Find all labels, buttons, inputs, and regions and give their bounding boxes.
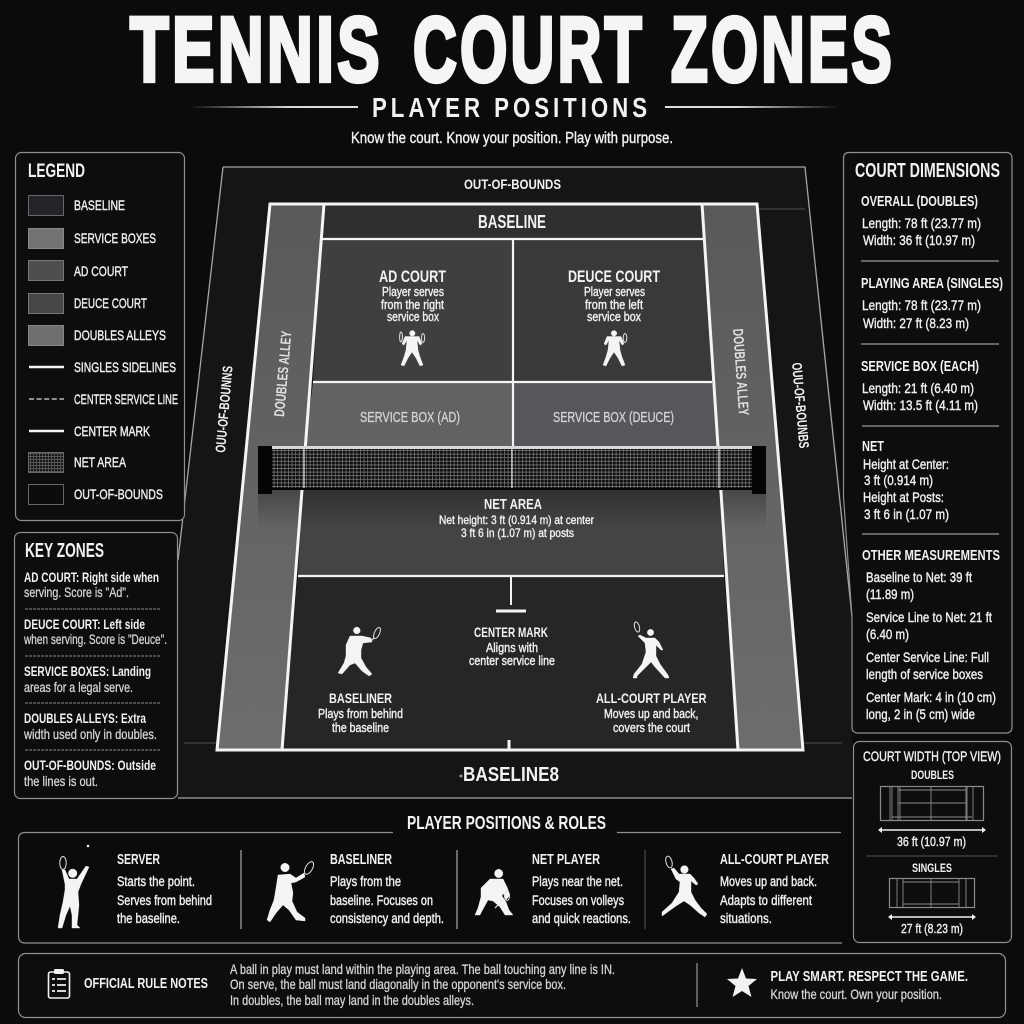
icon: baseliner bbox=[267, 860, 315, 922]
key zone: deuce court: DEUCE COURT: Left side bbox=[24, 616, 145, 632]
legend: doubles alleys bbox=[28, 326, 166, 346]
net area text bbox=[439, 496, 594, 540]
icon: court all-court player bbox=[633, 621, 669, 678]
net player text: NET PLAYER bbox=[532, 852, 600, 868]
net dimensions: 3 ft (0.914 m) bbox=[864, 472, 933, 488]
singles diagram bbox=[888, 861, 976, 936]
doubles alleys bbox=[217, 204, 803, 750]
ad court text: service box bbox=[387, 310, 440, 324]
legend: out-of-bounds bbox=[28, 484, 163, 504]
panel: player positions and roles bbox=[18, 813, 842, 943]
key zone: service boxes: areas for a legal serve. bbox=[24, 679, 133, 695]
all-court player role text: Adapts to different bbox=[720, 893, 812, 908]
center mark text: CENTER MARK bbox=[474, 625, 548, 640]
legend: service boxes bbox=[28, 228, 156, 248]
panel: official rule notes bbox=[18, 954, 1006, 1018]
legend heading: LEGEND bbox=[28, 161, 85, 182]
baseliner role text: consistency and depth. bbox=[330, 911, 444, 926]
server text: Starts the point. bbox=[117, 874, 195, 889]
rule notes text bbox=[230, 961, 615, 1008]
service box ad bbox=[305, 382, 513, 447]
deuce court text bbox=[568, 267, 660, 324]
overall doubles: Width: 36 ft (10.97 m) bbox=[863, 232, 975, 248]
roles heading: PLAYER POSITIONS & ROLES bbox=[407, 813, 606, 833]
net player text: and quick reactions. bbox=[532, 911, 631, 926]
all-court player text: Moves up and back, bbox=[604, 706, 698, 721]
baseliner text bbox=[318, 690, 403, 735]
key zone: doubles alleys bbox=[23, 710, 157, 742]
net player text: Focuses on volleys bbox=[532, 893, 624, 908]
key zone: doubles alleys: width used only in doubles. bbox=[23, 726, 157, 742]
legend: deuce court bbox=[28, 294, 147, 314]
title bbox=[130, 0, 895, 101]
legend: ad court: AD COURT bbox=[74, 263, 128, 279]
key zone: ad court: AD COURT: Right side when bbox=[24, 569, 159, 585]
icon: server bbox=[58, 845, 89, 928]
rule notes heading: OFFICIAL RULE NOTES bbox=[84, 976, 208, 992]
service box each: Width: 13.5 ft (4.11 m) bbox=[863, 397, 978, 413]
key zone: out-of-bounds bbox=[24, 757, 156, 789]
key zone: out-of-bounds: the lines is out. bbox=[24, 773, 98, 789]
playing area singles: Width: 27 ft (8.23 m) bbox=[863, 315, 969, 331]
all-court player role text: ALL-COURT PLAYER bbox=[720, 852, 829, 868]
deuce court text: DEUCE COURT bbox=[568, 267, 660, 286]
key zone: service boxes: SERVICE BOXES: Landing bbox=[24, 663, 151, 679]
net area text: 3 ft 6 in (1.07 m) at posts bbox=[461, 526, 574, 540]
label: out-of-bounds right: OUU-OF-BOUNBS bbox=[789, 362, 812, 449]
center mark text: Aligns with bbox=[486, 641, 538, 655]
all-court player text bbox=[596, 690, 706, 735]
other measurements: (11.89 m) bbox=[866, 586, 914, 602]
singles diagram: 27 ft (8.23 m) bbox=[901, 921, 963, 936]
label: baseline top: BASELINE bbox=[478, 212, 546, 232]
closing message: PLAY SMART. RESPECT THE GAME. bbox=[770, 969, 968, 985]
legend: center service line: CENTER SERVICE LINE bbox=[74, 391, 178, 407]
panel: court dimensions bbox=[844, 152, 1012, 733]
key zone: ad court: serving. Score is "Ad". bbox=[24, 584, 129, 600]
ad court text: from the right bbox=[381, 298, 444, 312]
key zone: ad court bbox=[24, 569, 159, 600]
key zone: deuce court: when serving. Score is "Deuce". bbox=[23, 631, 167, 647]
overall doubles: OVERALL (DOUBLES) bbox=[861, 193, 978, 210]
icon: all-court player bbox=[662, 855, 707, 917]
other measurements: Service Line to Net: 21 ft bbox=[866, 609, 992, 625]
deuce court bbox=[513, 239, 712, 382]
baseliner text: the baseline bbox=[332, 720, 389, 735]
panel: court width bbox=[854, 742, 1012, 942]
overall doubles bbox=[861, 193, 981, 248]
net player text bbox=[532, 852, 631, 926]
baseliner text: Plays from behind bbox=[318, 706, 403, 721]
server text: the baseline. bbox=[117, 911, 180, 926]
net dimensions: Height at Center: bbox=[863, 456, 949, 472]
legend: center mark bbox=[29, 423, 150, 439]
subtitle: PLAYER POSITIONS bbox=[372, 92, 651, 123]
title: TENNIS bbox=[130, 0, 383, 101]
deuce court text: Player serves bbox=[584, 285, 645, 299]
other measurements bbox=[862, 547, 1000, 722]
playing area singles: Length: 78 ft (23.77 m) bbox=[862, 297, 981, 313]
closing message: Know the court. Own your position. bbox=[770, 987, 942, 1002]
net dimensions: NET bbox=[862, 438, 884, 455]
rule notes text: A ball in play must land within the playing area. The ball touching any line is IN. bbox=[230, 961, 615, 977]
legend: net area: NET AREA bbox=[74, 454, 126, 470]
net area text: Net height: 3 ft (0.914 m) at center bbox=[439, 513, 594, 527]
label: out-of-bounds left: OUU-OF-BOUNNS bbox=[212, 365, 236, 453]
server text: Serves from behind bbox=[117, 893, 212, 908]
baseliner role text: Plays from the bbox=[330, 874, 401, 889]
back court bbox=[282, 576, 738, 750]
panel: key zones bbox=[14, 532, 178, 798]
panel: legend bbox=[16, 152, 184, 520]
doubles diagram: 36 ft (10.97 m) bbox=[897, 834, 966, 849]
legend: baseline: BASELINE bbox=[74, 197, 125, 213]
label: doubles alley right: DOUBLES ALLEY bbox=[729, 328, 751, 416]
service box each: SERVICE BOX (EACH) bbox=[861, 358, 979, 375]
closing message bbox=[770, 969, 968, 1002]
other measurements: Baseline to Net: 39 ft bbox=[866, 569, 972, 585]
net area text: NET AREA bbox=[484, 496, 542, 513]
label: out-of-bounds top: OUT-OF-BOUNDS bbox=[464, 176, 561, 192]
legend: service boxes: SERVICE BOXES bbox=[74, 230, 156, 246]
rule notes text: On serve, the ball must land diagonally in the opponent's service box. bbox=[230, 976, 566, 992]
ad court bbox=[313, 239, 513, 382]
server text: SERVER bbox=[117, 852, 160, 868]
center mark text: center service line bbox=[469, 654, 555, 668]
icon: court baseliner bbox=[338, 626, 382, 676]
label: baseline bottom: BASELINE8 bbox=[463, 764, 559, 786]
title: ZONES bbox=[671, 0, 895, 101]
icon: ad court player bbox=[400, 330, 425, 366]
key zone: doubles alleys: DOUBLES ALLEYS: Extra bbox=[24, 710, 146, 726]
service box each: Length: 21 ft (6.40 m) bbox=[862, 380, 974, 396]
label: doubles alley left: DOUBLES ALLEY bbox=[272, 330, 295, 417]
icon: clipboard bbox=[48, 969, 70, 998]
deuce court text: from the left bbox=[585, 298, 643, 312]
baseliner role text: BASELINER bbox=[330, 852, 392, 868]
center mark text bbox=[469, 625, 555, 668]
doubles diagram: DOUBLES bbox=[911, 768, 954, 782]
other measurements: length of service boxes bbox=[866, 666, 983, 682]
title: COURT bbox=[413, 0, 645, 101]
all-court player role text bbox=[720, 852, 829, 926]
other measurements: long, 2 in (5 cm) wide bbox=[866, 706, 975, 722]
rule notes text: In doubles, the ball may land in the doubles alleys. bbox=[230, 992, 474, 1008]
net area floor bbox=[258, 447, 766, 576]
deuce court text: service box bbox=[587, 310, 642, 324]
baseliner role text: baseline. Focuses on bbox=[330, 893, 433, 908]
legend: doubles alleys: DOUBLES ALLEYS bbox=[74, 327, 166, 343]
other measurements: Center Service Line: Full bbox=[866, 649, 989, 665]
doubles diagram bbox=[878, 768, 986, 849]
all-court player text: ALL-COURT PLAYER bbox=[596, 690, 706, 706]
playing area singles bbox=[861, 275, 1003, 331]
all-court player role text: situations. bbox=[720, 911, 772, 926]
baseline band bbox=[321, 204, 704, 239]
key zone: deuce court bbox=[23, 616, 167, 647]
legend: net area bbox=[28, 452, 126, 472]
legend: out-of-bounds: OUT-OF-BOUNDS bbox=[74, 486, 163, 502]
all-court player role text: Moves up and back. bbox=[720, 874, 817, 889]
ad court text bbox=[379, 267, 446, 324]
all-court player text: covers the court bbox=[613, 720, 690, 735]
net dimensions: 3 ft 6 in (1.07 m) bbox=[864, 506, 949, 522]
icon: deuce court player bbox=[603, 330, 627, 366]
baseliner text: BASELINER bbox=[329, 690, 392, 706]
key zone: out-of-bounds: OUT-OF-BOUNDS: Outside bbox=[24, 757, 156, 773]
server text bbox=[117, 852, 212, 926]
net player text: Plays near the net. bbox=[532, 874, 623, 889]
baseliner role text bbox=[330, 852, 444, 926]
key zones heading: KEY ZONES bbox=[25, 540, 104, 562]
court lines bbox=[217, 204, 803, 750]
label: service box ad: SERVICE BOX (AD) bbox=[360, 410, 460, 426]
other measurements: (6.40 m) bbox=[866, 626, 909, 642]
ad court text: Player serves bbox=[382, 285, 444, 299]
net dimensions: Height at Posts: bbox=[863, 489, 944, 505]
overall doubles: Length: 78 ft (23.77 m) bbox=[862, 215, 981, 231]
tagline: Know the court. Know your position. Play with purpose. bbox=[351, 130, 673, 147]
out-of-bounds area bbox=[150, 167, 852, 798]
other measurements: Center Mark: 4 in (10 cm) bbox=[866, 689, 996, 705]
tennis court diagram bbox=[150, 167, 852, 798]
label: service box deuce: SERVICE BOX (DEUCE) bbox=[553, 410, 674, 426]
legend: singles sidelines: SINGLES SIDELINES bbox=[74, 359, 176, 375]
service box deuce bbox=[513, 382, 718, 447]
legend: ad court bbox=[28, 260, 128, 280]
ad court text: AD COURT bbox=[379, 267, 446, 286]
net dimensions bbox=[862, 438, 949, 522]
legend: baseline bbox=[28, 196, 125, 216]
icon: star bbox=[727, 968, 757, 997]
icon: net player bbox=[475, 869, 513, 915]
singles diagram: SINGLES bbox=[912, 861, 952, 875]
key zone: service boxes bbox=[24, 663, 151, 695]
legend: deuce court: DEUCE COURT bbox=[74, 295, 147, 311]
legend: center mark: CENTER MARK bbox=[74, 423, 150, 439]
service box each bbox=[861, 358, 979, 413]
net bbox=[258, 446, 766, 494]
